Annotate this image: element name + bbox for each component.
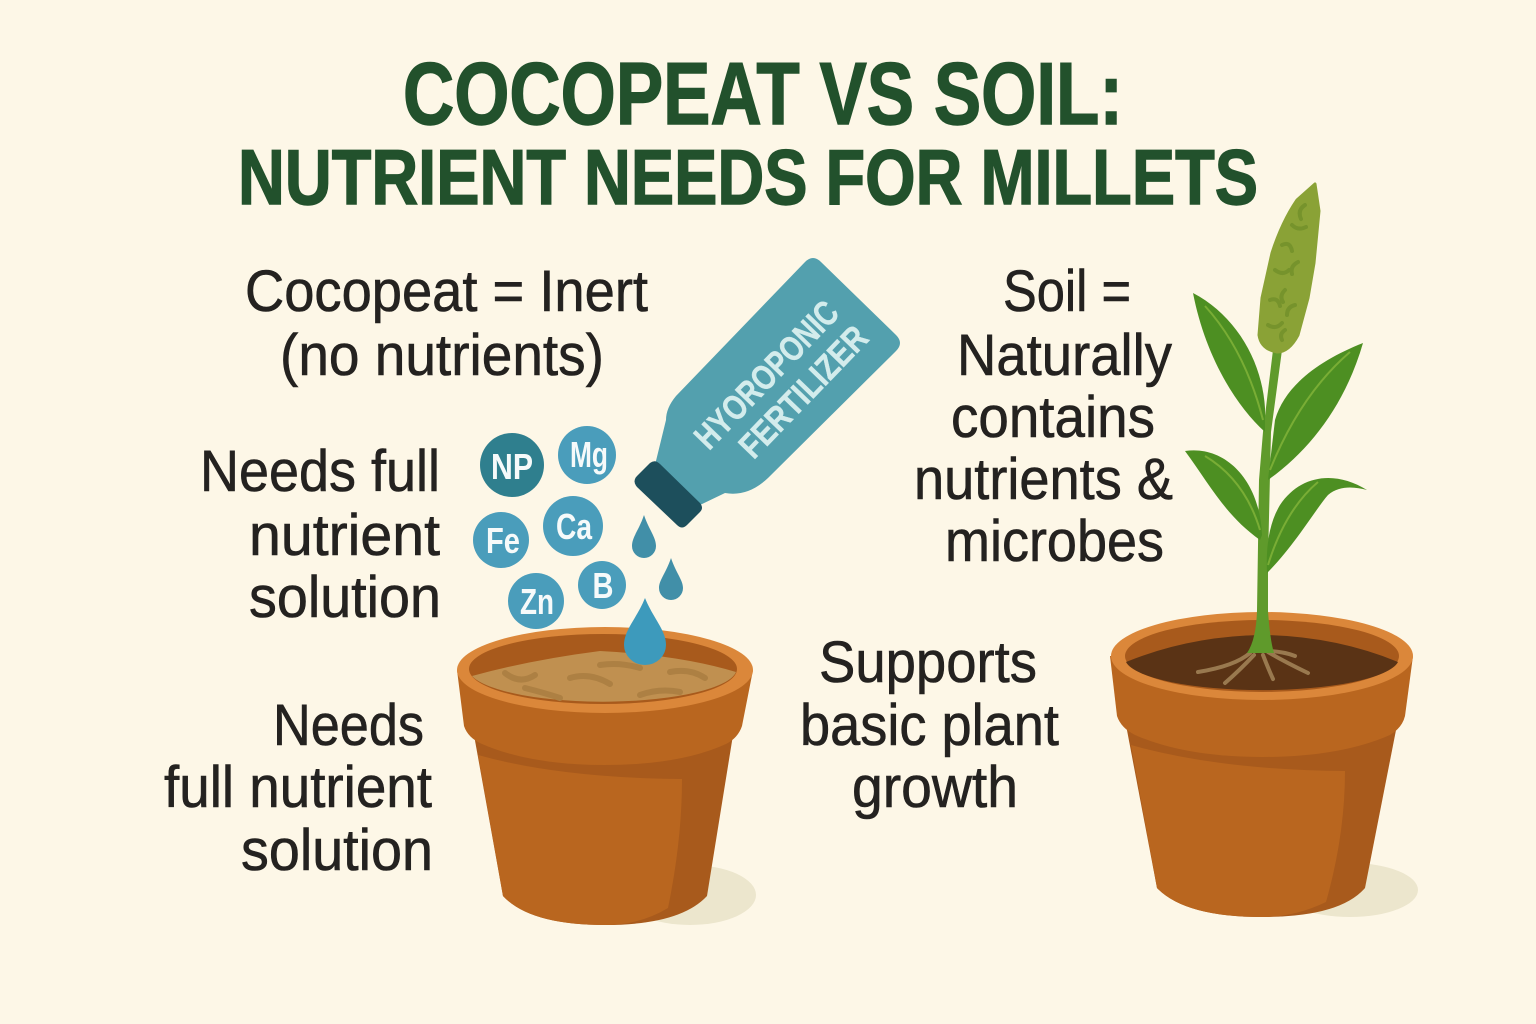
bottle label: FERTILIZER [731, 318, 876, 466]
cocopeat fill [472, 651, 736, 702]
bubble: Fe [473, 512, 529, 568]
bottle label: HYOROPONIC [687, 293, 847, 457]
pot rim [1111, 612, 1413, 700]
text block: needs full nutrient solution (lower) [164, 693, 433, 883]
millet plant [1185, 184, 1367, 683]
text block: supports basic plant growth: Supports [819, 630, 1037, 695]
soil fill [1126, 635, 1398, 690]
nutrient bubbles [473, 426, 626, 629]
text block: soil contains nutrients: nutrients & [914, 447, 1173, 512]
leaf: upper right [1268, 343, 1363, 480]
text block: soil contains nutrients: microbes [945, 509, 1164, 574]
bubble: B: B [592, 565, 614, 606]
seed head [1259, 184, 1319, 352]
drop 3 [624, 598, 666, 665]
text block: needs full nutrient solution (lower): Needs [273, 693, 424, 758]
title: COCOPEAT VS SOIL: [403, 44, 1123, 143]
pot: cocopeat [457, 627, 753, 925]
text block: supports basic plant growth: growth [852, 755, 1018, 820]
drop 1 [632, 515, 656, 558]
text block: needs full nutrient solution [200, 439, 441, 630]
bubble: NP: NP [491, 446, 533, 487]
text block: soil contains nutrients [914, 259, 1173, 574]
pot shadow: cocopeat [624, 865, 756, 925]
water drops [624, 515, 683, 665]
pot body [474, 735, 733, 925]
leaf: lower left [1185, 450, 1262, 540]
title [238, 44, 1258, 221]
bubble: Zn [508, 573, 564, 629]
text block: needs full nutrient solution (lower): full nutrient [164, 755, 432, 820]
text block: needs full nutrient solution: nutrient [249, 503, 440, 568]
bubble: Ca: Ca [556, 506, 593, 547]
pot rim [457, 627, 753, 713]
text block: cocopeat is inert [245, 259, 648, 388]
text block: supports basic plant growth: basic plant [800, 693, 1059, 758]
pot shadow: soil [1282, 863, 1418, 917]
bubble: Fe: Fe [486, 520, 520, 561]
roots [1198, 651, 1308, 683]
title: NUTRIENT NEEDS FOR MILLETS [238, 133, 1258, 221]
bubble: Mg [558, 426, 616, 484]
leaf: lower right [1267, 478, 1367, 573]
icon: fertilizer bottle [634, 258, 900, 528]
bubble: Ca [543, 496, 603, 556]
bottle cap [634, 461, 702, 528]
pot: soil [1110, 612, 1413, 917]
text block: soil contains nutrients: Naturally [957, 323, 1172, 388]
text block: supports basic plant growth [800, 630, 1059, 820]
bubble: Mg: Mg [570, 434, 608, 475]
text block: cocopeat is inert: Cocopeat = Inert [245, 259, 648, 324]
pot body [1126, 725, 1397, 917]
bubble: B [578, 561, 626, 609]
text block: needs full nutrient solution: solution [249, 565, 441, 630]
pot collar [457, 670, 753, 765]
text block: soil contains nutrients: contains [951, 385, 1155, 450]
leaf: upper left [1193, 293, 1265, 432]
bubble: Zn: Zn [520, 581, 554, 622]
drop 2 [659, 558, 683, 600]
text block: soil contains nutrients: Soil = [1003, 259, 1131, 324]
bubble: NP [480, 433, 544, 497]
pot collar [1110, 656, 1413, 757]
text block: needs full nutrient solution: Needs full [200, 439, 440, 504]
stem [1247, 350, 1282, 653]
text block: cocopeat is inert: (no nutrients) [280, 323, 604, 388]
text block: needs full nutrient solution (lower): solution [241, 818, 433, 883]
